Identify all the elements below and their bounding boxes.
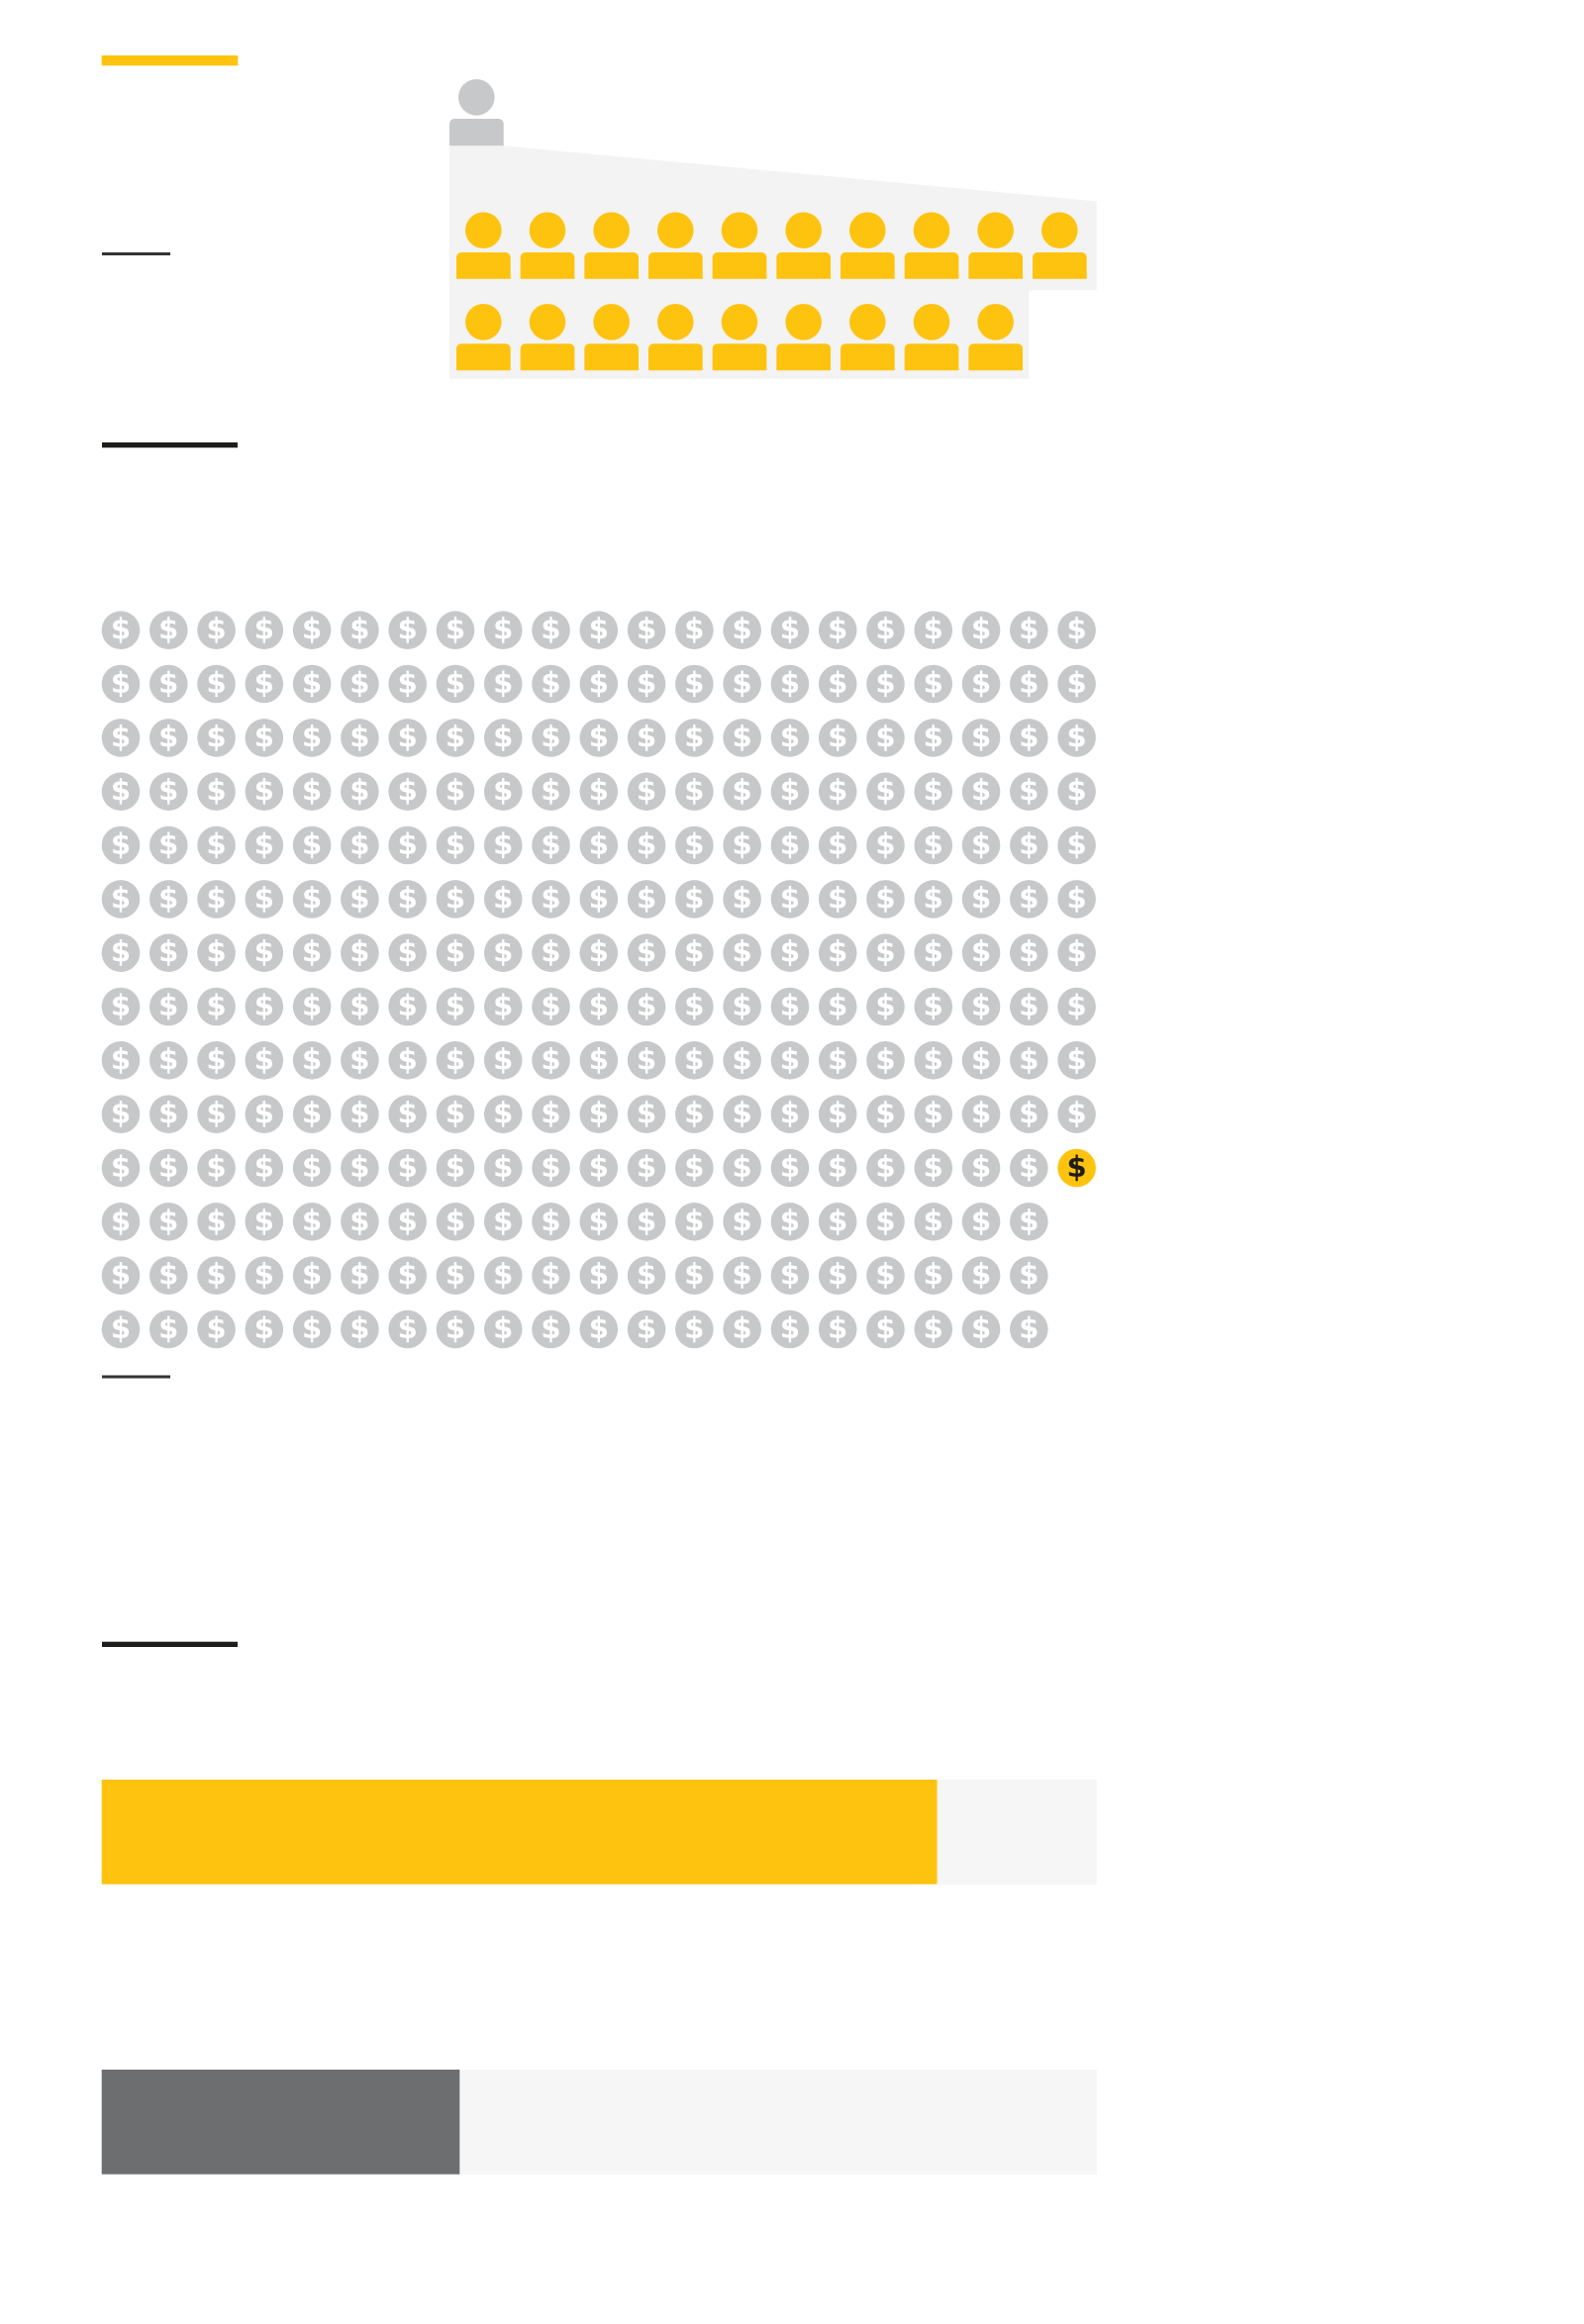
accent rule: yellow — [102, 55, 238, 65]
dollar coin grid: $$$$$$$$$$$$$$$$$$$$$ — [111, 1042, 1087, 1076]
audience row two: nine yellow people — [456, 304, 1023, 370]
dollar coin grid: $$$$$$$$$$$$$$$$$$$$$ — [111, 613, 1087, 646]
section rule: black — [102, 442, 238, 447]
dollar coin grid — [111, 613, 1087, 1345]
seating chart: presenter and audience — [449, 79, 1097, 379]
dollar coin grid: $$$$$$$$$$$$$$$$$$$$ — [111, 1258, 1039, 1292]
dollar coin grid: $$$$$$$$$$$$$$$$$$$$$ — [111, 1097, 1087, 1130]
short rule: section two — [102, 1376, 170, 1378]
dollar coin grid: $$$$$$$$$$$$$$$$$$$$$ — [111, 881, 1087, 915]
dollar coin grid: $$$$$$$$$$$$$$$$$$$$$ — [111, 720, 1087, 753]
dollar coin grid: $$$$$$$$$$$$$$$$$$$$ — [111, 1204, 1039, 1237]
section rule: black — [102, 1642, 238, 1647]
dollar coin grid: $$$$$$$$$$$$$$$$$$$$$ — [111, 935, 1087, 969]
icon: highlighted yellow dollar coin — [1057, 1149, 1096, 1187]
audience backdrop panel — [449, 145, 1097, 379]
bar chart: yellow share — [102, 1780, 1097, 1885]
icon: highlighted yellow dollar coin: $ — [1067, 1150, 1087, 1184]
short rule: section one — [102, 252, 170, 255]
bar chart: grey share — [102, 2070, 1097, 2175]
dollar coin grid: $$$$$$$$$$$$$$$$$$$$$ — [111, 774, 1087, 808]
dollar coin grid: $$$$$$$$$$$$$$$$$$$$$ — [111, 827, 1087, 861]
audience row one: ten yellow people — [456, 212, 1087, 279]
dollar coin grid: $$$$$$$$$$$$$$$$$$$$$ — [111, 666, 1087, 700]
dollar coin grid: $$$$$$$$$$$$$$$$$$$$ — [111, 1150, 1039, 1184]
dollar coin grid: $$$$$$$$$$$$$$$$$$$$ — [111, 1311, 1039, 1345]
dollar coin grid: $$$$$$$$$$$$$$$$$$$$$ — [111, 989, 1087, 1022]
icon: presenter in grey — [449, 79, 504, 145]
